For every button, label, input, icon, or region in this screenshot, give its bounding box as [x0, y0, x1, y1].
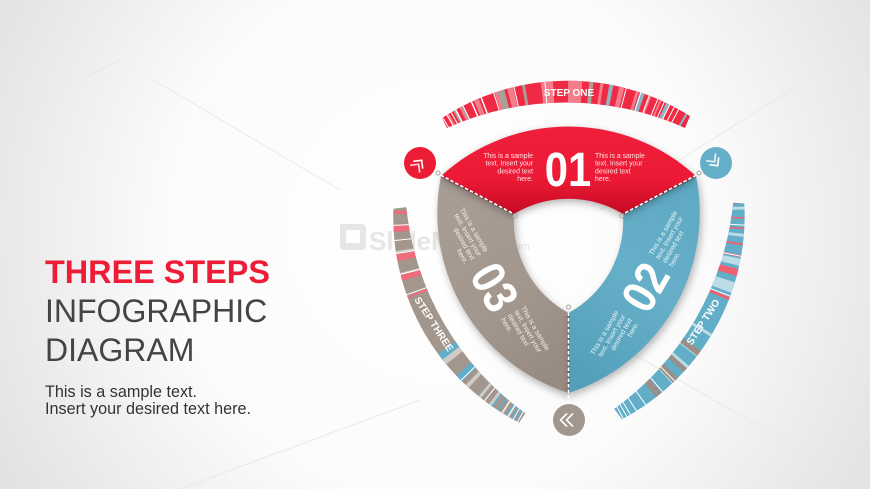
subtitle: Insert your desired text here. — [45, 400, 251, 418]
title: DIAGRAM — [45, 332, 194, 368]
text: 02 group: This is a sample — [590, 310, 621, 356]
text: 03 group — [429, 200, 559, 371]
text: 02 group: 02 — [610, 254, 681, 321]
text: 01 group: 01 — [545, 142, 591, 197]
watermark — [340, 224, 530, 256]
title: INFOGRAPHIC — [45, 293, 267, 329]
icon: brown arrow circle — [553, 404, 585, 436]
text: 01 group: here. — [517, 176, 533, 183]
text: 02 group: desired text — [662, 230, 686, 264]
label: step one: STEP ONE — [544, 88, 595, 99]
text: 03 group: This is a sample — [458, 207, 489, 254]
text: 02 group: text. Insert your — [655, 215, 685, 261]
subtitle — [45, 383, 251, 418]
text: 02 group: here. — [627, 321, 641, 338]
arc: step two stripes — [614, 202, 745, 420]
text: 01 group: desired text — [595, 168, 631, 175]
text: 03 group: text. Insert your — [512, 309, 543, 354]
text: 02 group — [579, 204, 709, 374]
text: 02 group: text. Insert your — [597, 313, 628, 358]
text: 03 group: This is a sample — [519, 305, 550, 352]
text: 02 group: here. — [668, 251, 682, 268]
text: 01 group: text. Insert your — [486, 161, 534, 168]
text: 01 group: desired text — [497, 168, 533, 175]
seams and stitching — [431, 170, 706, 407]
icon: blue arrow circle — [700, 147, 732, 179]
subtitle: This is a sample text. — [45, 383, 197, 401]
text: 01 group: here. — [595, 176, 611, 183]
text: 03 group: desired text — [506, 313, 530, 347]
panel: 03 brown — [429, 176, 568, 393]
arc: step one stripes — [440, 84, 692, 120]
text: 01 group: This is a sample — [595, 153, 645, 160]
arc: step three stripes — [393, 207, 526, 422]
text: 01 group: This is a sample — [483, 153, 533, 160]
title — [45, 254, 270, 368]
text: 02 group: desired text — [610, 317, 634, 352]
watermark: SlideModel — [369, 226, 506, 256]
text: 03 group: desired text — [452, 227, 475, 261]
text: 01 group: text. Insert your — [595, 161, 643, 168]
label: step two: STEP TWO — [685, 298, 723, 347]
text: 03 group: here. — [499, 317, 513, 334]
watermark: .com — [506, 241, 530, 253]
panel: 01 red — [441, 127, 696, 214]
text: 03 group: text. Insert your — [452, 213, 482, 258]
text: 01 group — [483, 142, 645, 197]
text: 03 group: here. — [455, 248, 469, 265]
text: 03 group: 03 — [459, 254, 530, 321]
text: 02 group: This is a sample — [648, 210, 679, 257]
title: THREE STEPS — [45, 254, 270, 290]
icon: red arrow circle — [404, 147, 436, 179]
label: step three: STEP THREE — [411, 295, 455, 354]
panel: 02 blue — [568, 176, 709, 393]
